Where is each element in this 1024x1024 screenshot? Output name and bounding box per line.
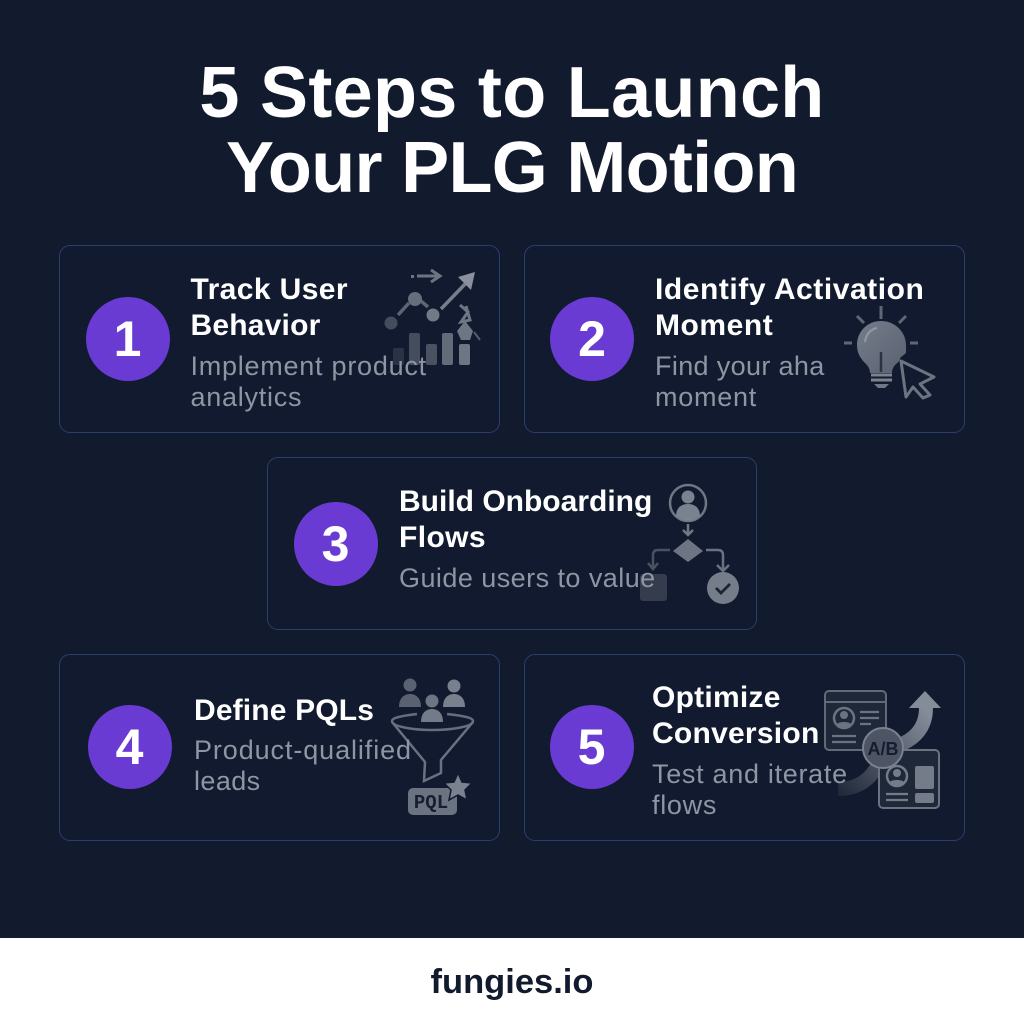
step 1 heading: Track User — [190, 273, 348, 306]
step 2 description — [655, 351, 825, 412]
step 3 heading — [399, 485, 652, 554]
step 4 heading: Define PQLs — [194, 694, 374, 727]
step 2 number badge — [550, 296, 634, 380]
icon: A/B test — [824, 690, 941, 809]
icon: onboarding flow — [640, 484, 739, 604]
panel: step 5 — [524, 654, 965, 841]
icon: A/B test: A/B — [867, 738, 898, 758]
panel: step 1 — [59, 245, 500, 433]
title: Your PLG Motion — [226, 128, 798, 208]
panel: step 2 — [524, 245, 965, 433]
brand name: fungies.io — [431, 962, 593, 1000]
step 2 heading: Identify Activation — [655, 273, 924, 306]
title: 5 Steps to Launch — [199, 53, 825, 133]
step 1 description: Implement product — [190, 351, 427, 381]
step 3 description: Guide users to value — [399, 563, 656, 593]
step 3 number badge: 3 — [322, 516, 349, 572]
step 4 description: leads — [194, 766, 261, 796]
step 5 heading: Optimize — [652, 681, 781, 714]
step 2 description: moment — [655, 382, 757, 412]
step 5 number badge: 5 — [578, 718, 605, 774]
step 1 description: analytics — [190, 382, 302, 412]
step 1 description — [190, 351, 427, 412]
step 4 number badge: 4 — [116, 718, 143, 774]
step 1 heading — [190, 273, 348, 342]
step 5 heading — [652, 681, 820, 750]
icon: PQL funnel: PQL — [413, 792, 448, 814]
panel: step 3 — [267, 457, 757, 630]
step 3 heading: Flows — [399, 521, 486, 554]
icon: PQL funnel — [390, 678, 474, 815]
step 5 description: Test and iterate — [652, 759, 848, 789]
step 1 number badge: 1 — [114, 310, 141, 366]
title — [199, 53, 825, 208]
step 5 number badge — [550, 704, 634, 788]
icon: analytics chart — [384, 268, 481, 365]
step 4 description: Product-qualified — [194, 735, 412, 765]
step 4 description — [194, 735, 412, 796]
step 5 heading: Conversion — [652, 717, 820, 750]
step 2 heading: Moment — [655, 309, 773, 342]
step 5 description — [652, 759, 848, 820]
step 2 heading — [655, 273, 924, 342]
step 3 number badge — [294, 502, 378, 586]
step 1 number badge — [86, 296, 170, 380]
step 4 number badge — [88, 704, 172, 788]
footer — [0, 938, 1024, 1024]
step 1 heading: Behavior — [190, 309, 320, 342]
step 2 number badge: 2 — [578, 310, 606, 366]
step 5 description: flows — [652, 790, 717, 820]
step 3 heading: Build Onboarding — [399, 485, 652, 518]
icon: light bulb and cursor — [844, 306, 936, 400]
step 2 description: Find your aha — [655, 351, 825, 381]
panel: step 4 — [59, 654, 500, 841]
